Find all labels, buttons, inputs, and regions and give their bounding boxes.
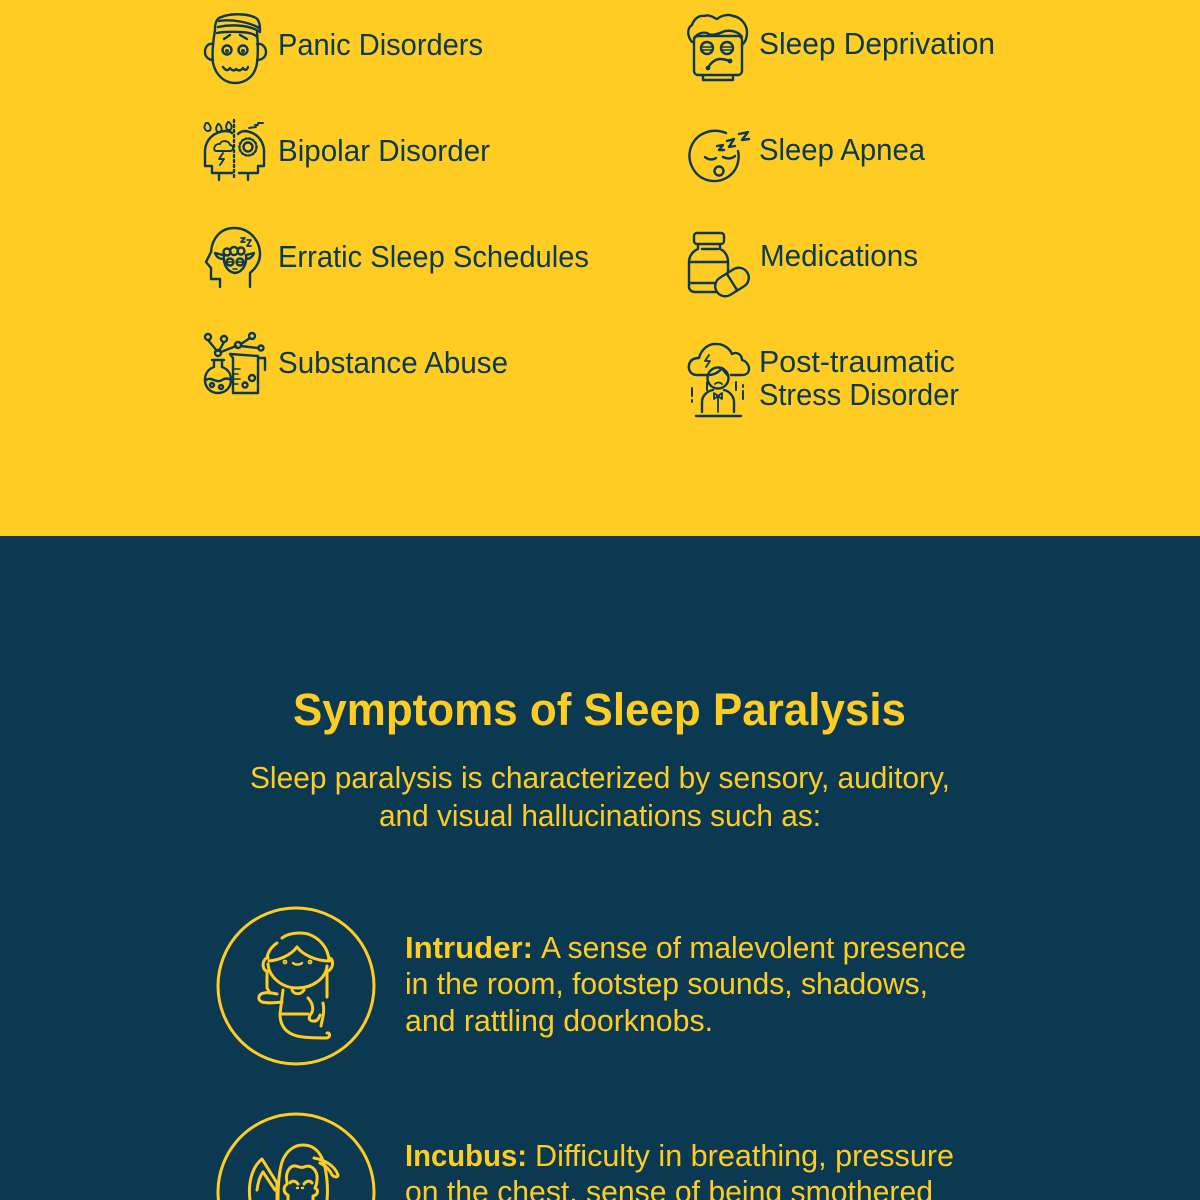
text: Sleep Apnea: Sleep Apnea <box>759 132 926 167</box>
text: Substance Abuse: Substance Abuse <box>278 345 508 380</box>
panel: causes <box>0 0 1200 536</box>
text: Post-traumatic Stress Disorder: Post-traumatic <box>759 344 955 379</box>
icon: intruder ghost in circle <box>218 908 374 1064</box>
text: Erratic Sleep Schedules: Erratic Sleep Schedules <box>278 239 589 274</box>
text: Panic Disorders: Panic Disorders <box>278 27 483 62</box>
icon: bipolar heads <box>205 120 264 180</box>
text: Intruder <box>405 930 966 1038</box>
text: Intruder: and rattling doorknobs. <box>405 1003 713 1038</box>
text: Intruder: Intruder: <box>405 930 533 965</box>
intro text <box>250 760 950 833</box>
text: Incubus: Difficulty in breathing, pressure <box>535 1138 954 1173</box>
text: Intruder: in the room, footstep sounds, shadows, <box>405 966 928 1001</box>
text: Post-traumatic Stress Disorder <box>759 344 959 412</box>
icon: incubus reaper in circle <box>218 1114 374 1200</box>
intro text: and visual hallucinations such as: <box>379 798 821 833</box>
panel: symptoms <box>0 536 1200 1200</box>
text: Medications: Medications <box>760 238 918 273</box>
icon: medicine bottle and pill <box>689 233 753 300</box>
text: Post-traumatic Stress Disorder: Stress Disorder <box>759 377 959 412</box>
icon: flask and beaker <box>205 333 265 393</box>
icon: sleeping face <box>689 131 749 181</box>
intro text: Sleep paralysis is characterized by sensory, auditory, <box>250 760 950 795</box>
icon: panic face <box>205 14 266 83</box>
text: Incubus: Incubus: <box>405 1138 527 1173</box>
heading: Symptoms of Sleep Paralysis: Symptoms of Sleep Paralysis <box>293 684 906 735</box>
icon: head with sheep <box>206 228 260 287</box>
icon: person under storm cloud <box>689 344 749 416</box>
text: Intruder: A sense of malevolent presence <box>541 930 966 965</box>
text: Bipolar Disorder: Bipolar Disorder <box>278 133 490 168</box>
text: Sleep Deprivation: Sleep Deprivation <box>759 26 995 61</box>
icon: tired square face <box>688 15 747 80</box>
text: Incubus <box>405 1138 954 1200</box>
